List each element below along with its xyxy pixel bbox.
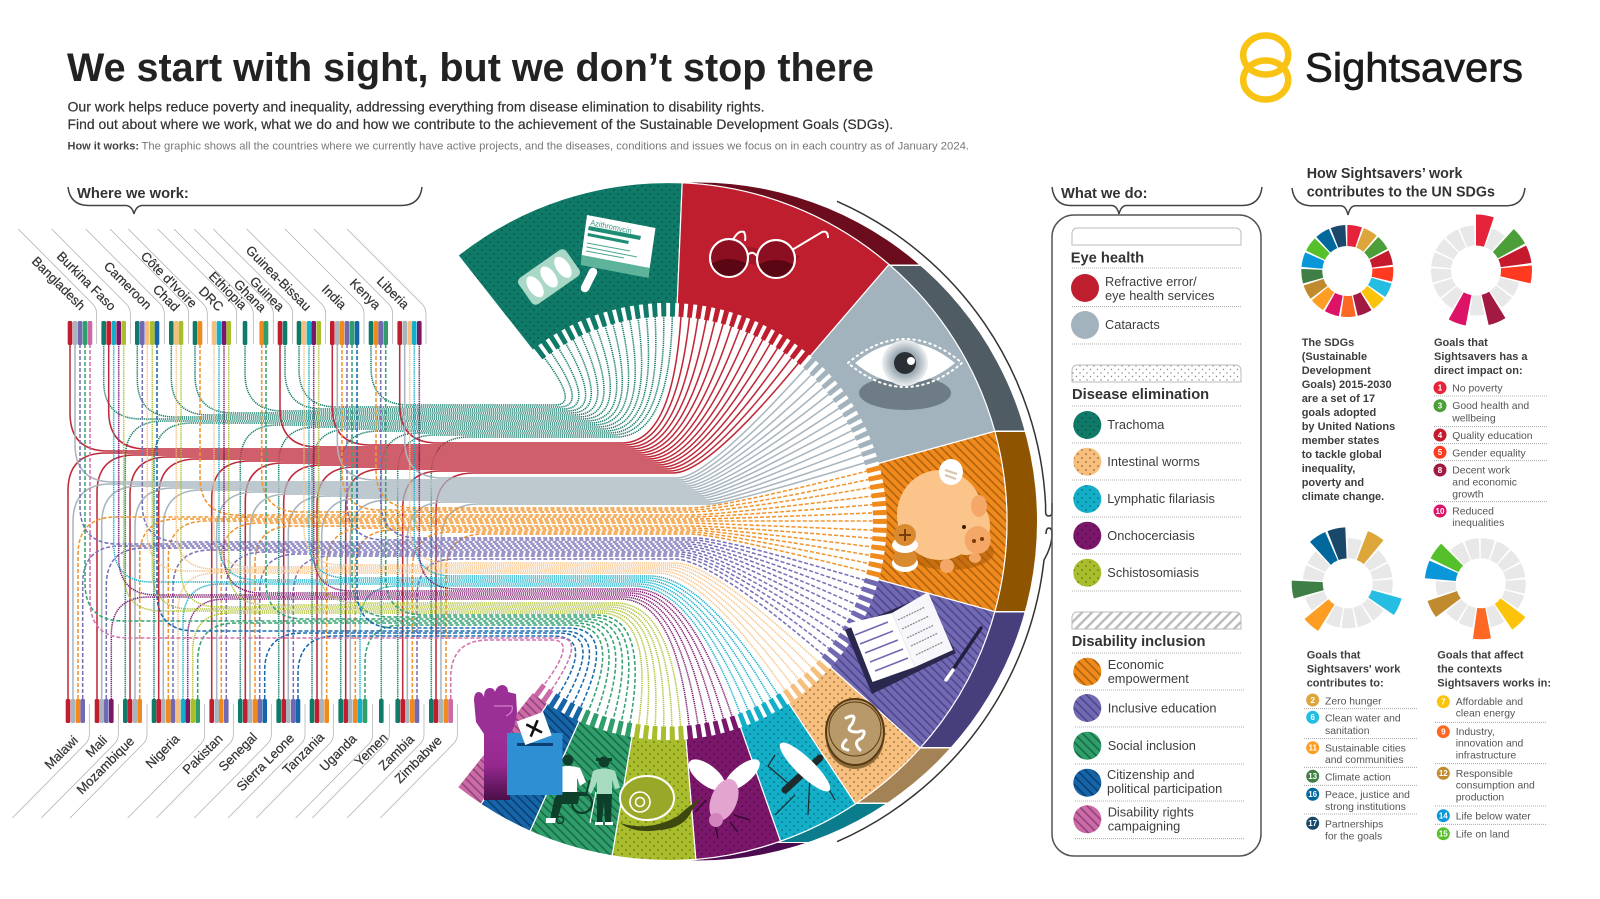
text: what the SDGs are: Goals) 2015-2030 (1302, 379, 1392, 391)
list: contributing goals: 17 (1308, 819, 1318, 828)
text: what the SDGs are: member states (1302, 435, 1379, 447)
list: context goals: Industry, (1456, 727, 1495, 738)
country: Pakistan (156, 699, 233, 818)
country: Ghana (194, 229, 273, 345)
list: direct impact goals (1434, 337, 1547, 529)
list: direct impact goals: Goals that (1434, 337, 1488, 349)
legend group: disease elimination: Lymphatic filariasis (1107, 491, 1215, 506)
legend group: disease elimination: Schistosomiasis (1107, 565, 1199, 580)
connector lines: lymphatic filariasis (114, 344, 778, 714)
country: Malawi (12, 699, 89, 818)
list: contributing goals: strong institutions (1325, 802, 1406, 813)
legend group: disability inclusion: political participation (1107, 781, 1222, 796)
wheel sector: cataracts (810, 264, 995, 464)
country: Kenya (314, 229, 393, 345)
country: Yemen: Yemen (352, 730, 391, 769)
wheel sector: citizenship (481, 703, 579, 831)
country: Burkina Faso: Burkina Faso (54, 249, 119, 314)
list: direct impact goals: 4 (1438, 431, 1443, 440)
icon: petri dish with worm (826, 699, 884, 769)
wheel sector: inclusive education (830, 580, 995, 748)
country: Nigeria: Nigeria (143, 731, 183, 771)
list: direct impact goals: Good health and (1452, 401, 1529, 412)
wheel sector: refractive error (677, 183, 889, 356)
heading: where we work (68, 186, 422, 214)
list: contributing goals: Sustainable cities (1325, 743, 1406, 754)
country: India (285, 229, 364, 345)
how it works note: How it works: (68, 140, 139, 152)
list: contributing goals (1304, 649, 1417, 842)
list: direct impact goals: direct impact on: (1434, 365, 1523, 377)
legend group: eye health: Cataracts (1105, 317, 1160, 332)
legend group: eye health: Eye health (1071, 251, 1144, 267)
legend group: disability inclusion: Citizenship and (1107, 767, 1194, 782)
text: what the SDGs are: The SDGs (1302, 337, 1354, 349)
icon: blackfly (684, 754, 765, 838)
heading: what we do (1052, 186, 1262, 214)
icon: glasses (710, 232, 828, 278)
country: Mali (41, 699, 118, 818)
country: Zimbabwe: Zimbabwe (392, 733, 445, 786)
country: DRC (158, 229, 237, 345)
list: contributing goals: for the goals (1325, 831, 1382, 842)
country: Ethiopia (174, 229, 253, 345)
intro text block: Find out about where we work, what we do and how we contribute to the achievement of the Sustainable Development Goals (SDGs). (68, 116, 893, 132)
list: direct impact goals: 5 (1438, 448, 1443, 457)
country: Cameroon: Cameroon (101, 259, 155, 312)
list: contributing goals: 13 (1308, 772, 1318, 781)
legend group: disease elimination: Intestinal worms (1107, 454, 1200, 469)
country: Liberia: Liberia (374, 274, 413, 312)
heading: SDG contribution: contributes to the UN SDGs (1307, 185, 1495, 201)
text: what the SDGs are: (Sustainable (1302, 351, 1367, 363)
country: Yemen (312, 699, 391, 818)
list: context goals: 15 (1439, 830, 1448, 838)
wheel sector: intestinal worms (789, 667, 920, 804)
text: what the SDGs are: poverty and (1302, 477, 1364, 489)
list: context goals: Goals that affect (1437, 649, 1524, 661)
country: Zimbabwe (380, 699, 457, 818)
country: Cameroon (86, 229, 164, 345)
Sightsavers logo: Sightsavers (1305, 45, 1523, 91)
legend group: disease elimination (1072, 365, 1241, 591)
country: Chad (110, 229, 189, 345)
country: Ghana: Ghana (231, 277, 270, 315)
list: contributing goals: contributes to: (1307, 677, 1384, 689)
legend group: eye health: Refractive error/ (1105, 274, 1197, 289)
list: context goals: Life on land (1456, 830, 1510, 841)
legend group: eye health: eye health services (1105, 288, 1215, 303)
heading: what we do: What we do: (1061, 186, 1147, 202)
connector lines: onchocerciasis (111, 344, 732, 726)
SDG wheel: context goals (1440, 543, 1521, 624)
country: Sierra Leone (228, 699, 305, 818)
list: context goals: Life below water (1456, 811, 1531, 822)
heading: SDG contribution (1292, 166, 1525, 215)
list: direct impact goals: inequalities (1452, 518, 1504, 529)
list: contributing goals: Zero hunger (1325, 696, 1382, 707)
list: direct impact goals: Reduced (1452, 507, 1494, 518)
country: Guinea-Bissau: Guinea-Bissau (243, 243, 314, 314)
text: what the SDGs are: Development (1302, 365, 1371, 377)
text: what the SDGs are: to tackle global (1302, 449, 1382, 461)
country: Mali: Mali (83, 732, 110, 760)
wheel sector: disability rights (458, 692, 548, 804)
list: context goals: consumption and (1456, 781, 1535, 792)
country: Kenya: Kenya (347, 276, 384, 313)
list: context goals: the contexts (1437, 663, 1502, 675)
list: contributing goals: 6 (1310, 713, 1315, 722)
country: Mozambique: Mozambique (74, 734, 137, 797)
legend group: disability inclusion (1072, 612, 1244, 839)
list: contributing goals: 2 (1310, 696, 1315, 705)
text: what the SDGs are: climate change. (1302, 491, 1384, 503)
list: contributing goals: and communities (1325, 755, 1404, 766)
connector lines: schistosomiasis (124, 344, 681, 728)
connector lines: disability rights (90, 344, 572, 699)
list: contributing goals: Partnerships (1325, 819, 1383, 830)
intro text block (68, 99, 893, 132)
text: what the SDGs are: inequality, (1302, 463, 1355, 475)
list: direct impact goals: and economic (1452, 477, 1517, 488)
list: context goals: infrastructure (1456, 750, 1517, 761)
list: direct impact goals: 1 (1438, 384, 1443, 392)
list: direct impact goals: 8 (1438, 466, 1443, 475)
legend group: disease elimination: Onchocerciasis (1107, 528, 1195, 543)
list: contributing goals: 16 (1308, 790, 1318, 799)
connector lines: inclusive education (80, 344, 865, 699)
legend group: disease elimination: Disease elimination (1072, 387, 1209, 403)
icon: eye (848, 339, 962, 410)
connector lines: citizenship (157, 344, 596, 708)
legend group: disability inclusion: Economic (1108, 657, 1164, 672)
comb teeth around the wheel (536, 310, 880, 734)
list: contributing goals: sanitation (1325, 726, 1370, 737)
list: context goals: Affordable and (1456, 697, 1523, 708)
country: Côte d'Ivoire: Côte d'Ivoire (138, 249, 200, 311)
country: Guinea: Guinea (247, 274, 288, 314)
text: what the SDGs are: by United Nations (1302, 421, 1395, 433)
how it works note: The graphic shows all the countries where we currently have active projects, and the diseases, conditions and issues we focus on in each country as of January 2024. (142, 140, 969, 152)
list: direct impact goals: 3 (1438, 402, 1443, 410)
icon: snail (620, 776, 702, 831)
list: contributing goals: Goals that (1307, 649, 1361, 661)
list: direct impact goals: Gender equality (1452, 448, 1526, 459)
list: contributing goals: Clean water and (1325, 714, 1401, 725)
list: context goals: 14 (1439, 812, 1448, 820)
legend group: disability inclusion: Disability inclusion (1072, 634, 1206, 650)
country: Guinea-Bissau (243, 229, 326, 345)
list: context goals (1435, 649, 1551, 841)
list: direct impact goals: 10 (1436, 507, 1445, 516)
list: context goals: 7 (1441, 698, 1446, 706)
country: Uganda (296, 699, 373, 818)
wheel sector: schistosomiasis (612, 736, 696, 861)
text: what the SDGs are: goals adopted (1302, 407, 1376, 419)
legend group: disability inclusion: Social inclusion (1108, 738, 1196, 753)
connector lines: economic empowerment (78, 344, 874, 699)
list: context goals: Responsible (1456, 769, 1513, 780)
list: direct impact goals: growth (1452, 489, 1484, 500)
country: Nigeria (128, 699, 205, 818)
text: what the SDGs are (1302, 337, 1395, 503)
country: Zambia (347, 699, 424, 818)
wheel sector: social inclusion (530, 721, 632, 856)
country: Senegal: Senegal (216, 729, 260, 774)
list: direct impact goals: Decent work (1452, 466, 1511, 477)
list: contributing goals: Sightsavers' work (1307, 663, 1401, 675)
country: Burkina Faso (52, 229, 130, 345)
connector lines: cataracts (73, 344, 865, 699)
list: direct impact goals: Sightsavers has a (1434, 351, 1528, 363)
wheel rim crescent (680, 180, 1040, 863)
country: Côte d'Ivoire (128, 229, 207, 345)
icon: two people with wheelchair and cane (546, 754, 620, 825)
list: direct impact goals: Quality education (1452, 431, 1533, 442)
SDG wheel: contributing goals (1307, 543, 1388, 624)
list: contributing goals: Peace, justice and (1325, 790, 1410, 801)
country: Tanzania: Tanzania (280, 729, 328, 777)
list: context goals: clean energy (1456, 709, 1516, 720)
connector lines: refractive error (68, 316, 799, 699)
title: We start with sight, but we don’t stop there (67, 46, 874, 90)
country: Mozambique (70, 699, 147, 818)
list: context goals: innovation and (1456, 739, 1524, 750)
legend group: disease elimination: Trachoma (1107, 417, 1165, 432)
country: Pakistan: Pakistan (180, 731, 226, 777)
list: direct impact goals: wellbeing (1451, 413, 1496, 424)
SDG wheel: direct impact goals (1436, 230, 1516, 311)
SDG wheel: all 17 goals (1312, 236, 1383, 306)
country: Zambia: Zambia (376, 731, 418, 773)
list: context goals: Sightsavers works in: (1437, 677, 1551, 689)
country: Guinea (213, 229, 293, 345)
wheel sector: onchocerciasis (686, 727, 780, 860)
list: context goals: production (1456, 792, 1504, 803)
intro text block: Our work helps reduce poverty and inequality, addressing everything from disease elimination to disability rights. (68, 99, 764, 115)
country: Tanzania (256, 699, 333, 818)
legend group: eye health (1071, 228, 1241, 344)
country: Sierra Leone: Sierra Leone (234, 730, 297, 794)
legend group: disability inclusion: empowerment (1108, 671, 1189, 686)
legend group: disability inclusion: Inclusive education (1108, 701, 1217, 716)
list: direct impact goals: No poverty (1452, 384, 1503, 395)
list: context goals: 9 (1441, 728, 1446, 736)
country: Bangladesh: Bangladesh (29, 254, 88, 313)
connector lines: intestinal worms (147, 344, 818, 699)
country: Bangladesh (18, 229, 97, 345)
icon: antibiotic box and pills: Azithromycin (590, 218, 633, 236)
country: Uganda: Uganda (317, 731, 360, 774)
list: contributing goals: Climate action (1325, 773, 1391, 784)
icon: raised fist and ballot box (474, 685, 562, 800)
country: Ethiopia: Ethiopia (206, 269, 250, 313)
icon: antibiotic box and pills (516, 215, 656, 307)
country: Senegal (194, 699, 271, 818)
country: Chad: Chad (150, 282, 183, 314)
text: what the SDGs are: are a set of 17 (1302, 393, 1375, 405)
wheel mask (328, 182, 1008, 861)
country: DRC: DRC (196, 284, 227, 314)
wheel sector: economic empowerment (878, 431, 1007, 612)
legend group: disability inclusion: campaigning (1108, 819, 1180, 834)
legend group: disability inclusion: Disability rights (1108, 805, 1194, 820)
connector lines: social inclusion (85, 344, 635, 724)
heading: where we work: Where we work: (77, 186, 189, 202)
icon: open book and pen (845, 592, 981, 694)
country: Malawi: Malawi (42, 733, 81, 772)
Sightsavers logo (1243, 36, 1523, 100)
icon: mosquito (768, 737, 836, 815)
connector lines: trachoma (104, 316, 672, 699)
list: context goals: 12 (1439, 769, 1448, 778)
wheel sector: trachoma (458, 183, 682, 350)
list: contributing goals: 11 (1308, 744, 1317, 752)
panel: what we do legend (1052, 215, 1261, 856)
heading: SDG contribution: How Sightsavers’ work (1307, 166, 1462, 182)
country: India: India (319, 282, 350, 313)
country: Liberia (347, 229, 426, 345)
outer bracket arc (837, 201, 1052, 842)
icon: piggy bank and coins (892, 459, 994, 573)
wheel sector: lymphatic filariasis (740, 703, 856, 841)
